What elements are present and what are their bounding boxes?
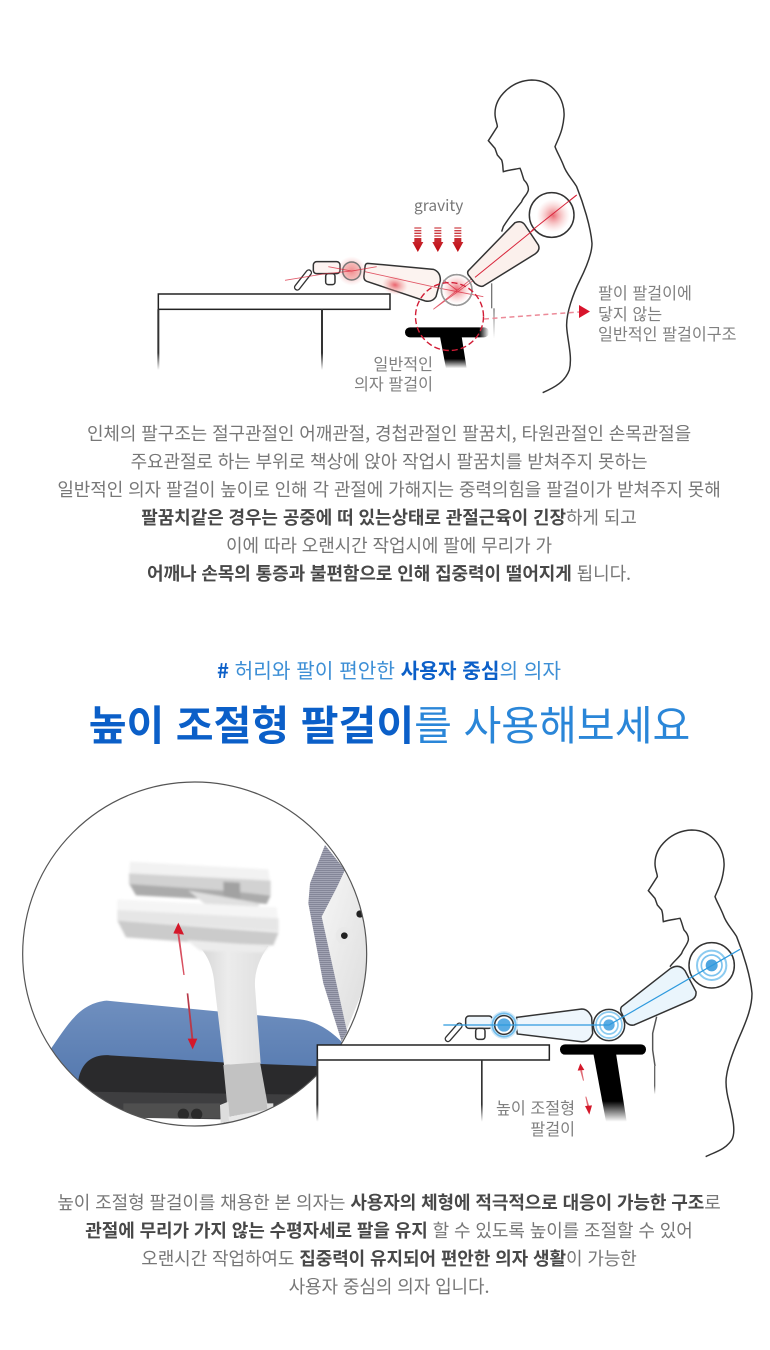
armrest: raised black armrest: [560, 1044, 646, 1122]
figure: ordinary armrest posture diagram: [157, 79, 593, 394]
label: height adjustable armrest: [496, 1095, 575, 1140]
callout text: arm does not reach armrest: 일반적인 팔걸이구조: [598, 321, 737, 345]
backrest: [308, 845, 368, 1042]
arm: hand, forearm and joints with red stress marks: [285, 193, 577, 309]
icon: red height arrows: [578, 1063, 592, 1115]
text block: height adjustable armrest benefits: 높이 조절형 팔걸이를 채용한 본 의자는 사용자의 체형에 적극적으로 대응이 가능한 구조로: [57, 1189, 721, 1215]
text block: height adjustable armrest benefits: 관절에 무리가 가지 않는 수평자세로 팔을 유지 할 수 있도록 높이를 조절할 수 있어: [85, 1217, 693, 1243]
armrest post: [201, 946, 273, 1125]
text block: arm joint explanation: [57, 420, 721, 586]
text block: arm joint explanation: 팔꿈치같은 경우는 공중에 떠 있는상태로 관절근육이 긴장하게 되고: [141, 504, 637, 530]
label: height adjustable armrest: 팔걸이: [530, 1116, 575, 1140]
label: height adjustable armrest: 높이 조절형: [496, 1095, 575, 1119]
armrest pad: motion layers: [117, 862, 279, 953]
callout: dashed circle and arrow: [416, 282, 590, 350]
icon: body outline: [648, 830, 752, 1157]
table: [157, 294, 390, 370]
subheading: # 허리와 팔이 편안한 사용자 중심의 의자: [217, 655, 561, 684]
label: ordinary armrest: 일반적인: [373, 350, 433, 374]
label: ordinary armrest: 의자 팔걸이: [354, 371, 433, 395]
text block: height adjustable armrest benefits: 오랜시간 작업하여도 집중력이 유지되어 편안한 의자 생활이 가능한: [141, 1245, 637, 1271]
text block: height adjustable armrest benefits: [57, 1189, 721, 1299]
seat cushion: [50, 1001, 345, 1130]
gravity label: gravity: [414, 194, 463, 216]
table: [316, 1045, 549, 1140]
callout text: arm does not reach armrest: [598, 280, 737, 345]
photo circle: chair armrest close-up: [23, 782, 368, 1130]
text block: arm joint explanation: 어깨나 손목의 통증과 불편함으로 인해 집중력이 떨어지게 됩니다.: [147, 560, 631, 586]
callout text: arm does not reach armrest: 닿지 않는: [598, 300, 662, 324]
icon: red double arrow: [173, 923, 197, 1049]
armrest: ordinary black armrest: [405, 327, 489, 368]
text block: arm joint explanation: 인체의 팔구조는 절구관절인 어깨관절, 경첩관절인 팔꿈치, 타원관절인 손목관절을: [87, 420, 691, 446]
text block: arm joint explanation: 일반적인 의자 팔걸이 높이로 인해 각 관절에 가해지는 중력의힘을 팔걸이가 받쳐주지 못해: [57, 476, 721, 502]
arm: hand, forearm and joints with blue alignment marks: [443, 943, 740, 1043]
label: ordinary armrest: [354, 350, 433, 395]
text block: arm joint explanation: 주요관절로 하는 부위로 책상에 앉아 작업시 팔꿈치를 받쳐주지 못하는: [131, 448, 647, 474]
heading: 높이 조절형 팔걸이를 사용해보세요: [89, 692, 690, 752]
icon: gravity arrows: [412, 227, 463, 252]
callout text: arm does not reach armrest: 팔이 팔걸이에: [598, 280, 692, 304]
icon: body outline: [488, 80, 592, 393]
text block: arm joint explanation: 이에 따라 오랜시간 작업시에 팔에 무리가 가: [226, 532, 552, 558]
figure: height adjustable armrest: [22, 781, 753, 1158]
text block: height adjustable armrest benefits: 사용자 중심의 의자 입니다.: [289, 1273, 489, 1299]
